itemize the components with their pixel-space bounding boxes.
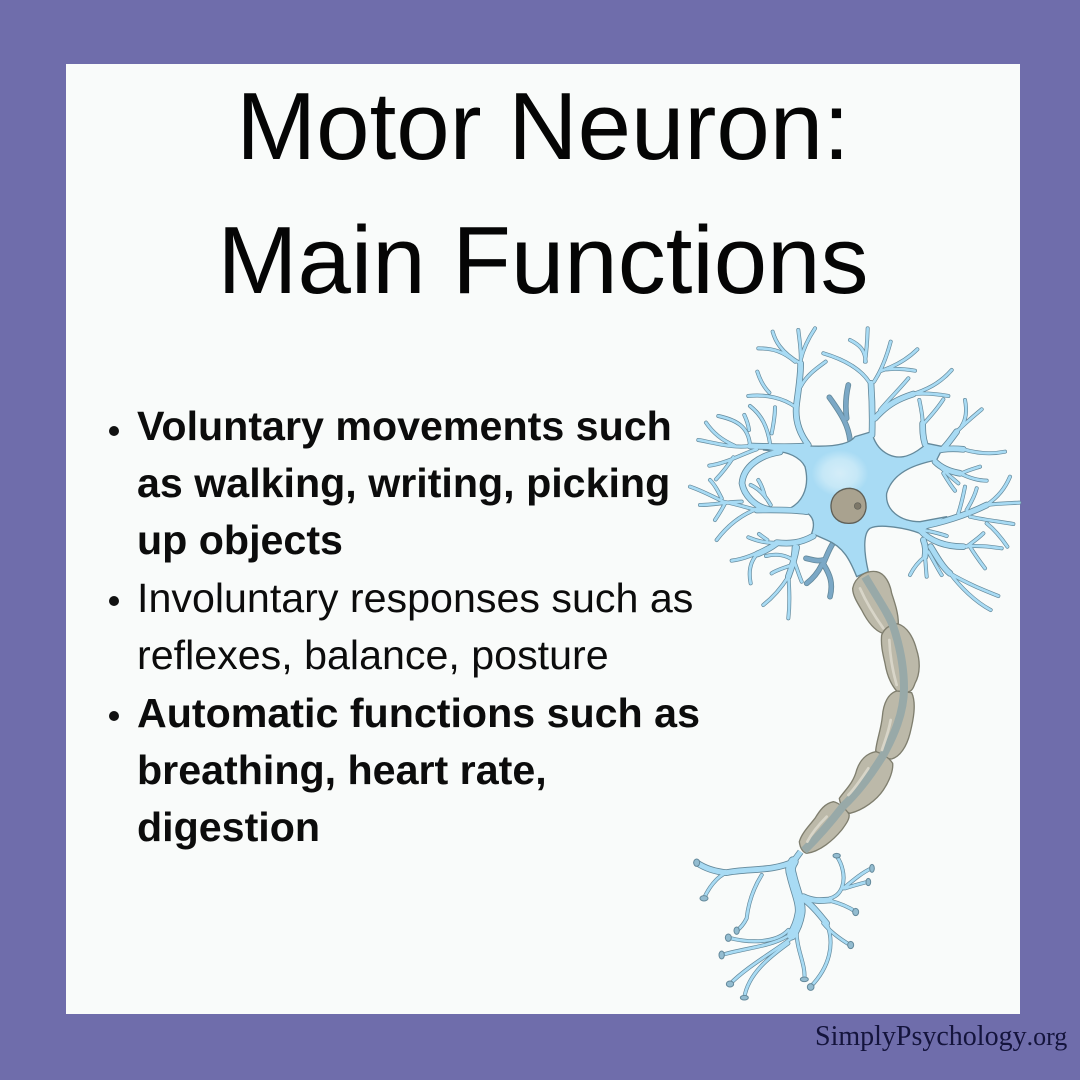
bullet: automatic functions: breathing, heart rate, xyxy=(137,747,547,793)
nucleus xyxy=(831,488,866,523)
dark branches behind cell body xyxy=(806,385,850,597)
dendrites and cell body xyxy=(690,328,1019,618)
myelin segments xyxy=(799,571,919,853)
footer: source credit: SimplyPsychology.org xyxy=(815,1021,1067,1052)
axon terminal branches xyxy=(694,852,874,1000)
title: Main Functions xyxy=(218,207,868,314)
panel: white content card xyxy=(66,64,1020,1014)
bullet: automatic functions: digestion xyxy=(137,804,320,850)
bullet: voluntary movements: as walking, writing, picking xyxy=(137,460,670,506)
axon with myelin sheaths xyxy=(694,571,919,1000)
bullet: voluntary movements xyxy=(109,403,672,563)
cell body xyxy=(763,432,947,577)
cytoplasm glow xyxy=(812,450,868,497)
axon core xyxy=(804,577,904,851)
bullet: involuntary responses: Involuntary responses such as xyxy=(137,575,693,621)
bullet: automatic functions: Automatic functions such as xyxy=(137,690,700,736)
bullet: involuntary responses xyxy=(109,575,693,678)
text block: bullet list of functions xyxy=(109,403,700,850)
title xyxy=(218,73,868,314)
bullet: voluntary movements: Voluntary movements such xyxy=(137,403,672,449)
bullet: voluntary movements: up objects xyxy=(137,517,343,563)
title: Motor Neuron: xyxy=(236,73,850,180)
axon highlights xyxy=(807,588,897,842)
bullet: automatic functions xyxy=(109,690,700,850)
bullet: involuntary responses: reflexes, balance, posture xyxy=(137,632,609,678)
synaptic bulbs xyxy=(694,853,874,1000)
